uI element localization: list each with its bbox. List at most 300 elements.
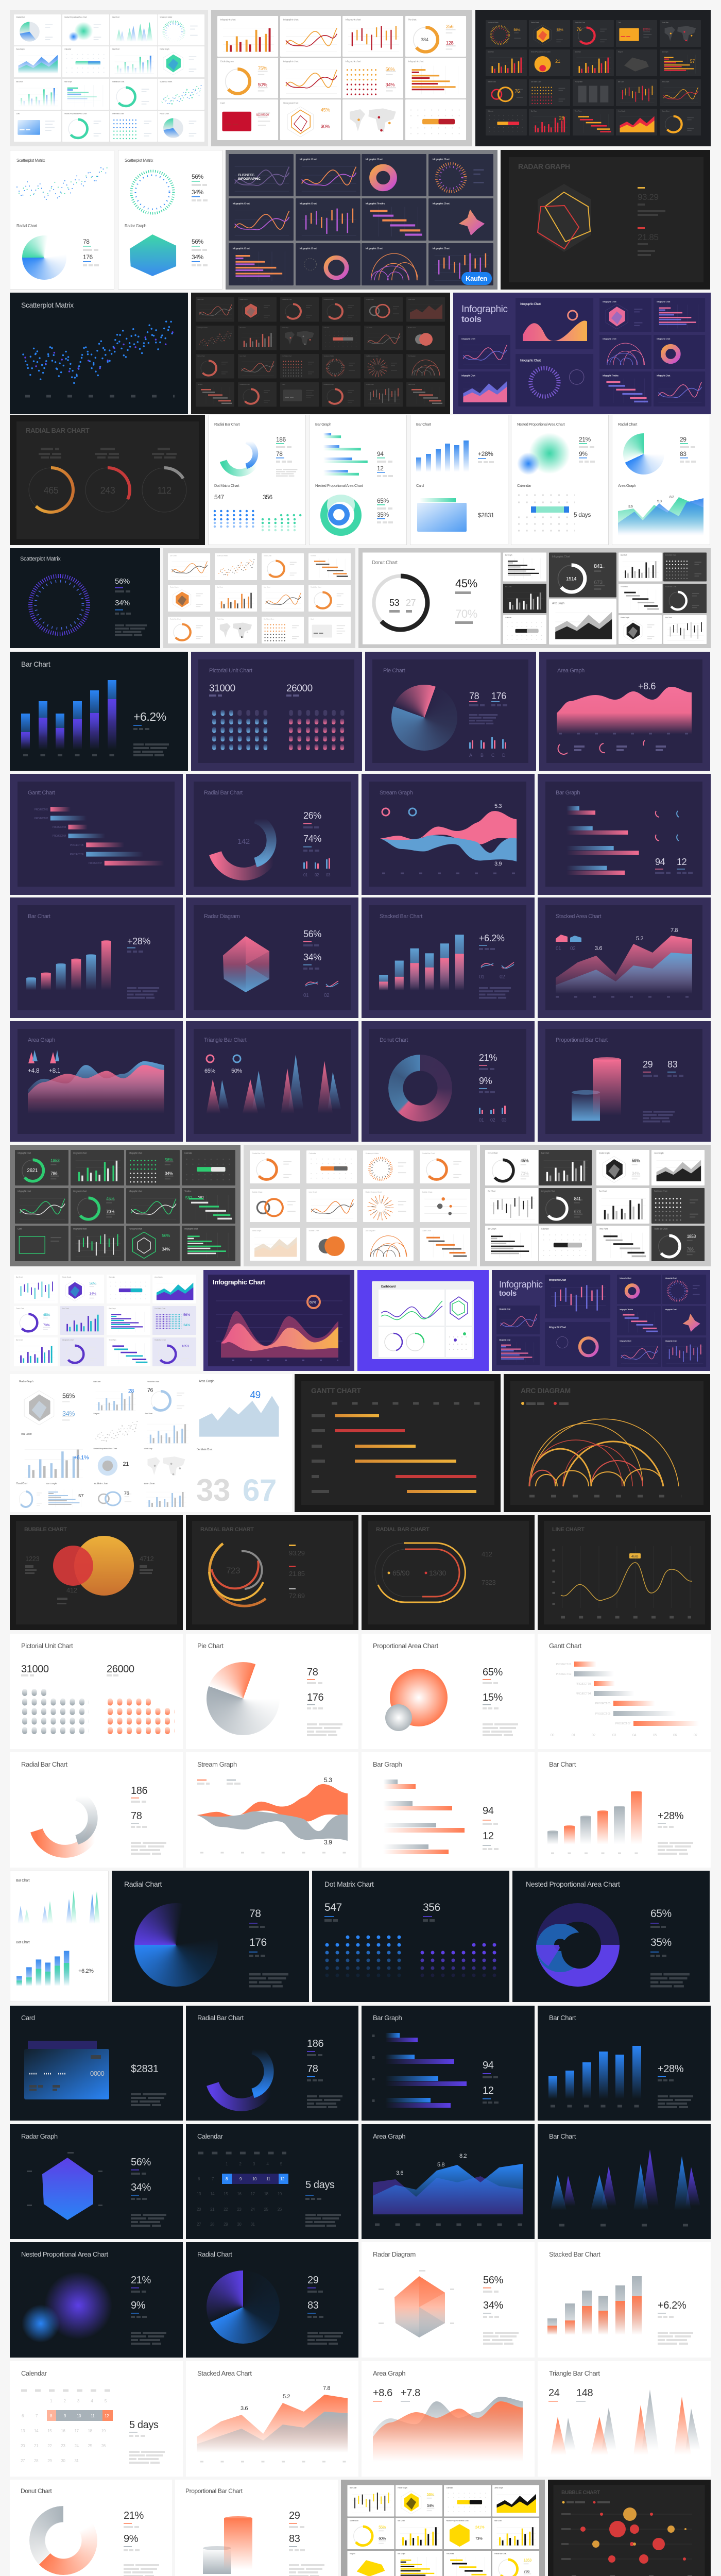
panel: dot matrix dark: Dot Matrix Chart — [324, 1880, 374, 1888]
stats: 94 — [377, 450, 384, 457]
stats: 29 — [643, 1059, 653, 1070]
stats: 83 — [680, 450, 686, 457]
values: 24 — [548, 2387, 560, 2399]
tile: Infographic chart — [73, 1190, 87, 1193]
panel: white radial and area graph: Radial Chart — [618, 422, 638, 427]
tile — [651, 1188, 705, 1224]
tile: Bar Chart — [541, 1152, 550, 1155]
labels: 3.9 — [494, 861, 502, 867]
project labels: PROJECT 04 — [53, 835, 66, 838]
tile: scatterplot ring — [158, 14, 204, 45]
panel: calendar dark — [186, 2124, 358, 2239]
stats: 9% — [579, 450, 588, 457]
area layers — [373, 2164, 523, 2217]
tile: left area 2: Infographic Chart — [461, 374, 476, 377]
tile: Infographic chart — [73, 1152, 87, 1155]
tile: area: Area Graph — [618, 110, 626, 112]
donut: Donut Chart — [16, 1482, 28, 1485]
tile: dot matrix: Dot Matrix Chart — [112, 113, 124, 115]
stats — [377, 497, 393, 523]
left drops — [212, 710, 272, 753]
panel: radial bar chart navy — [186, 774, 358, 895]
arcs — [529, 1419, 679, 1486]
stats — [249, 1908, 288, 1988]
panel: orange and red chart mosaic — [211, 10, 472, 146]
tile — [444, 2551, 491, 2576]
stats — [83, 238, 99, 266]
tile: timeline — [362, 198, 426, 241]
tile: scatter: Scatterplot Matrix — [198, 327, 208, 329]
project labels: PROJECT 01 — [35, 808, 48, 811]
panel: area graph navy: Area Graph — [28, 1037, 55, 1043]
panel: triangle bar chart white: Triangle Bar Chart — [549, 2369, 600, 2377]
tile: calendar — [405, 99, 466, 140]
stats — [643, 1059, 683, 1122]
project labels: PROJECT 06 — [70, 853, 84, 856]
tile: arcs — [362, 243, 426, 285]
panel: donut chart white: 9% — [124, 2533, 139, 2545]
tile: 786 — [524, 2569, 529, 2574]
panel: area graph navy — [10, 1021, 183, 1142]
tile: 34% — [183, 1324, 190, 1327]
tile: magnet: Magnet — [618, 51, 623, 53]
panel: bar graph navy: Bar Graph — [556, 790, 580, 796]
tile: 841 — [574, 1196, 581, 1201]
tile: pricing table — [573, 79, 614, 106]
stats — [478, 450, 494, 463]
purple dots — [422, 1945, 497, 1975]
values: 356 — [423, 1902, 440, 1913]
credit card — [24, 2041, 109, 2099]
radar graph: 34% — [62, 1410, 75, 1417]
tile — [215, 617, 257, 643]
calendar numbers: 6 — [198, 2177, 200, 2181]
tile: Infographic Chart — [62, 1339, 74, 1341]
stats: 12 — [677, 857, 687, 867]
tile: Area Graph — [154, 1276, 163, 1278]
tile: Radial Bar Chart — [654, 1228, 668, 1230]
tile — [539, 1188, 592, 1224]
tile: 70% — [521, 1171, 529, 1176]
tile: Calendar — [309, 1152, 316, 1155]
triangle icons — [28, 1050, 59, 1063]
labels: PROJECT 04 — [576, 1692, 591, 1696]
panel: bar chart dark: Bar Chart — [21, 660, 50, 668]
tile: Dot Matrix Chart — [154, 1308, 165, 1310]
tooltip — [629, 1553, 641, 1558]
credit card: 0000 — [90, 2070, 104, 2077]
big dotted numbers: 67 — [243, 1473, 277, 1507]
panel: infographic tools purple lower — [492, 1270, 710, 1371]
tile: lines — [364, 326, 403, 350]
tile: Bubble Chart — [309, 1229, 319, 1232]
tile: Radial Bar Chart — [311, 586, 321, 588]
panel: gantt chart navy — [10, 774, 183, 895]
panel: area graph navy — [539, 652, 710, 771]
three arcs — [209, 1544, 266, 1606]
heading: Infographic — [499, 1279, 543, 1290]
tile: dotted waves — [654, 371, 705, 406]
stats: +28% — [658, 2063, 684, 2075]
panel: gantt chart white: Gantt Chart — [549, 1642, 582, 1650]
tile: radial bar — [110, 79, 157, 110]
mini bars — [479, 1106, 507, 1123]
tile: Radial Bar Chart — [252, 1152, 265, 1155]
tile: area graph: Area Graph — [16, 48, 25, 50]
panel: nested proportional dark — [512, 1871, 710, 2002]
panel: radar graph dark — [501, 150, 710, 290]
tile: bar chart triangles — [110, 14, 157, 45]
stats: 83 — [307, 2300, 319, 2311]
stats: 176 — [83, 253, 93, 261]
tile: area — [406, 297, 445, 321]
ring 112: 112 — [157, 485, 171, 496]
panel: stacked area chart navy — [538, 897, 711, 1018]
panel: cylinder bar chart white — [538, 1752, 711, 1868]
panel: bar chart dark: Bar Chart — [549, 2014, 576, 2022]
panel: donut chart white — [10, 2480, 172, 2576]
stats: 94 — [655, 857, 665, 867]
panel: proportional bar white: 29 — [289, 2510, 300, 2521]
bar chart — [144, 1482, 186, 1507]
pie — [207, 2270, 280, 2344]
tile: pie chart: 256 — [446, 24, 454, 30]
title: radial chart: Radial Chart — [16, 224, 38, 228]
tile: Bar Chart — [398, 2520, 405, 2522]
spheres — [385, 1669, 448, 1731]
labels — [556, 1663, 630, 1725]
tile: swirl: Infographic Chart — [300, 247, 317, 250]
tile: Donut Chart — [16, 1308, 24, 1310]
mini arcs — [558, 740, 645, 754]
area graph 49 — [199, 1380, 279, 1437]
tile: 60% — [379, 2536, 386, 2541]
tile: 56% — [632, 1158, 640, 1163]
stats: 34% — [303, 952, 321, 962]
tile: Time Plans — [599, 1228, 608, 1230]
tile: pie chart: 384 — [421, 37, 428, 43]
panel: white bar graph and nested ring: Nested Proportional Area Chart — [315, 483, 364, 488]
tile: two lines: Infographic chart — [283, 60, 299, 63]
panel: white bar chart and card: Card — [416, 483, 424, 488]
tile: Line Chart — [198, 298, 204, 300]
legend values: 93.29 — [638, 192, 659, 202]
panel: area graph white — [362, 2361, 535, 2477]
tile: bubble: Bubble Chart — [408, 327, 416, 329]
world map: World Map — [144, 1448, 152, 1450]
calendar numbers: 10 — [252, 2177, 257, 2181]
tile: bar graph 57: 57 — [690, 59, 695, 64]
tile: Timeline — [184, 1190, 192, 1193]
panel: triangles dark: Bar Chart — [549, 2132, 576, 2140]
tile: Magnet — [350, 2553, 355, 2555]
tile — [308, 617, 351, 643]
panel: bar graph white: Bar Graph — [373, 1760, 402, 1768]
tile: circle diagram: 50% — [258, 82, 268, 88]
tile — [107, 1275, 150, 1303]
panel: radial bar chart navy: 142 — [237, 837, 250, 846]
tile — [215, 585, 257, 612]
tile: 55% — [379, 2525, 386, 2530]
panel: donut chart white: Donut Chart — [21, 2487, 52, 2495]
pie — [134, 1903, 218, 1987]
tile: Infographic chart — [18, 1190, 31, 1193]
tile — [545, 1322, 610, 1366]
labels: PROJECT 03 — [576, 1683, 591, 1686]
tile — [308, 553, 351, 580]
tile: magnet — [616, 49, 657, 76]
sparkline icons — [303, 981, 338, 998]
tile: line area: Infographic chart — [283, 19, 299, 22]
tile: radial chart: Radial Chart — [16, 16, 25, 19]
panel: pictorial unit chart white — [10, 1634, 183, 1749]
panel: pictorial unit chart navy: Pictorial Unit Chart — [209, 668, 252, 674]
value: $2831 — [131, 2063, 159, 2075]
panel: radial bar three arcs: 723 — [226, 1566, 240, 1575]
racetrack — [375, 1543, 466, 1602]
tile: bars — [573, 49, 614, 76]
tile: calendar — [62, 46, 109, 77]
panel: radar diagram white — [362, 2242, 535, 2358]
project labels: PROJECT 03 — [53, 826, 66, 829]
panel: business infographic dark mosaic — [226, 150, 497, 290]
tile: scatterplot 239: Scatterplot Matrix — [488, 22, 499, 24]
tile — [651, 1150, 705, 1185]
tile — [168, 617, 210, 643]
tile: dotted ring — [428, 154, 493, 196]
legend: 02 — [570, 946, 576, 952]
tile: Donut Chart — [264, 555, 272, 557]
tile — [503, 615, 546, 644]
tile: radar: Radar Graph — [160, 48, 169, 50]
panel: nested blobs dark — [10, 2242, 183, 2358]
panel: dark red grey mosaic — [191, 293, 450, 414]
row labels — [312, 1414, 329, 1493]
tile: Bar Chart — [350, 2487, 356, 2489]
calendar numbers: 27 28 29 30 31 — [197, 2222, 255, 2227]
panel: area graph white: Area Graph — [373, 2369, 405, 2377]
numbers: 12 — [105, 2414, 109, 2418]
tile: 241% — [475, 2525, 485, 2530]
tile: bubble 76 — [486, 79, 527, 106]
axis: 02 — [592, 1734, 595, 1737]
tile: timeline — [599, 371, 651, 406]
stats — [131, 2275, 166, 2345]
panel: arc diagram dark: ARC DIAGRAM — [521, 1386, 571, 1395]
tile: area — [616, 109, 657, 135]
tile: 56% — [165, 1157, 174, 1162]
tile: two lines — [280, 58, 341, 98]
panel: donut chart navy: Donut Chart — [380, 1037, 408, 1043]
values: 547 — [324, 1902, 342, 1913]
tile — [485, 1226, 538, 1261]
tile: card — [280, 382, 319, 407]
tile — [485, 1188, 538, 1224]
stats: 176 — [307, 1692, 323, 1703]
panel: pie chart white: Pie Chart — [197, 1642, 224, 1650]
tile: horizontal bars: Infographic chart — [408, 60, 424, 63]
blue dots — [327, 1937, 400, 1975]
stats: 26% — [303, 810, 321, 821]
tile: 45% — [106, 1196, 115, 1201]
values: 4712 — [140, 1555, 153, 1563]
tile — [347, 2485, 394, 2516]
panel: line chart — [538, 1515, 711, 1630]
tile: 56% — [162, 1233, 170, 1238]
numbers: 6 — [22, 2414, 24, 2418]
stats: 34% — [115, 599, 130, 607]
mini bars: 01 — [303, 873, 308, 877]
stacked bars — [379, 935, 464, 990]
tile: Bar Graph — [505, 554, 512, 556]
panel: radar graph dark — [10, 2124, 183, 2239]
numbers: 8 — [50, 2414, 53, 2418]
tile: dots: Infographic chart — [346, 60, 361, 63]
values: 148 — [576, 2387, 593, 2399]
radar — [223, 936, 269, 992]
panel: scatterplot and radial white — [10, 150, 114, 290]
tile: dot matrix: Dot Matrix Chart — [531, 81, 541, 83]
bars big: +6.1% — [74, 1454, 89, 1461]
magnet — [93, 1413, 138, 1442]
tile: business infographic — [229, 154, 294, 196]
tile: 34% — [90, 1292, 96, 1296]
stats — [483, 1805, 499, 1850]
tile: Bar Chart — [16, 1339, 23, 1341]
tile: world map: World Map — [662, 22, 669, 24]
nested ring — [324, 498, 358, 532]
x ticks — [23, 754, 121, 756]
tile: radial bar: Radial Bar Chart — [112, 81, 124, 83]
bars — [574, 1662, 699, 1726]
stats — [307, 2038, 342, 2108]
panel: stacked bar white: Stacked Bar Chart — [549, 2250, 600, 2258]
stats: 5 days — [129, 2419, 159, 2431]
panel: radial bar three arcs — [186, 1515, 358, 1630]
labels: PROJECT 06 — [595, 1713, 610, 1716]
panel: gantt chart dark — [295, 1374, 501, 1512]
axis — [551, 1734, 697, 1737]
big dotted numbers: 33 — [196, 1473, 230, 1507]
panel: nested proportional dark: Nested Proportional Area Chart — [526, 1880, 620, 1888]
panel: proportional bar chart navy — [538, 1021, 711, 1142]
tile — [619, 584, 662, 613]
area — [28, 1061, 164, 1114]
values — [209, 683, 313, 697]
panel: area graph dark — [362, 2124, 535, 2239]
panel: triangles dark — [538, 2124, 711, 2239]
tile — [168, 585, 210, 612]
project labels: PROJECT 02 — [35, 817, 48, 820]
tile: Timeline — [311, 555, 316, 557]
tile: swirl — [296, 243, 360, 285]
tile: radar: Radar Graph — [531, 22, 539, 24]
world map — [144, 1448, 185, 1476]
tile: big donut: 53 — [389, 598, 400, 608]
tile: left area 2 — [458, 371, 510, 406]
mini bars: 02 — [490, 1117, 495, 1123]
tile: arcs — [406, 354, 445, 378]
tile: area line: Infographic Chart — [300, 158, 317, 161]
tile: columns — [428, 243, 493, 285]
values: 31000 — [209, 683, 235, 694]
panel: bar charts narrow white: Bar Chart — [16, 1879, 30, 1883]
tile: circle diagram — [217, 58, 278, 98]
tile: ring: Infographic Chart — [366, 158, 383, 161]
ring 243: 243 — [100, 485, 115, 496]
tile: bars: Bar Chart — [16, 81, 23, 83]
tile — [182, 1150, 235, 1185]
stats: 56% — [131, 2157, 151, 2168]
ring 243 — [85, 468, 130, 512]
tile: area — [549, 599, 616, 645]
tile: Infographic Chart — [620, 1277, 631, 1279]
tile: timeline: Infographic Timeline — [366, 202, 385, 205]
bars: Bar Chart — [145, 1413, 153, 1415]
stats: 21% — [131, 2275, 151, 2286]
tile: Line Chart — [264, 586, 270, 588]
tile: nested ring — [62, 111, 109, 142]
tile: 70% — [43, 1324, 50, 1327]
radial bar — [215, 819, 273, 874]
tile: Radar Graph — [599, 1152, 610, 1155]
panel: white nested area and calendar: Calendar — [517, 483, 531, 488]
tile: bar graph: Bar Graph — [64, 81, 72, 83]
sparklines: 02 — [500, 974, 505, 980]
tile: nested area 21 — [529, 49, 570, 76]
tile: Radar Graph — [398, 2487, 407, 2489]
tile: time plans: Time Plans — [575, 110, 582, 112]
tile: 34% — [632, 1171, 640, 1176]
tile: dots — [342, 58, 403, 98]
calendar numbers — [197, 2162, 285, 2227]
axis: 03 — [612, 1734, 616, 1737]
tile: bubble 76: 76 — [514, 89, 520, 94]
tile: Infographic Chart — [549, 1279, 566, 1282]
heading: tools — [499, 1289, 517, 1298]
panel: calendar dark: Calendar — [197, 2132, 224, 2140]
panel: bar chart navy: Bar Chart — [28, 913, 50, 920]
stats: 9% — [131, 2300, 146, 2311]
panel: stacked area white: 7.8 — [323, 2385, 330, 2392]
tile: scatter — [196, 326, 234, 350]
stats: 56% — [115, 577, 130, 586]
tile — [347, 2518, 394, 2549]
dot matrix: 356 — [263, 494, 273, 501]
panel: white radial bar and dot matrix — [208, 415, 306, 545]
tile: dots: Dot Matrix Chart — [282, 355, 291, 357]
tile: 1853 — [50, 1158, 60, 1163]
bubbles — [53, 1536, 134, 1596]
radial 76: Radial Bar Chart — [147, 1381, 159, 1383]
tile: floating bars: Bar Chart — [618, 81, 624, 83]
tile — [662, 1306, 706, 1335]
highlight — [222, 2174, 288, 2184]
tile — [306, 1189, 357, 1222]
tile: 56% — [427, 2492, 434, 2497]
values — [548, 2387, 593, 2402]
tile: Bar Chart — [494, 2520, 502, 2522]
tile: Line Chart — [170, 555, 177, 557]
tile — [215, 553, 257, 580]
stats: 34% — [192, 253, 204, 261]
area graph: 8.2 — [670, 496, 674, 499]
tile: dotted waves: Infographic Chart — [657, 374, 671, 377]
tile: Time Plans — [621, 585, 628, 587]
tile — [182, 1226, 235, 1261]
tile: Bubble Chart — [252, 1191, 263, 1193]
dot matrix: 547 — [214, 494, 225, 501]
